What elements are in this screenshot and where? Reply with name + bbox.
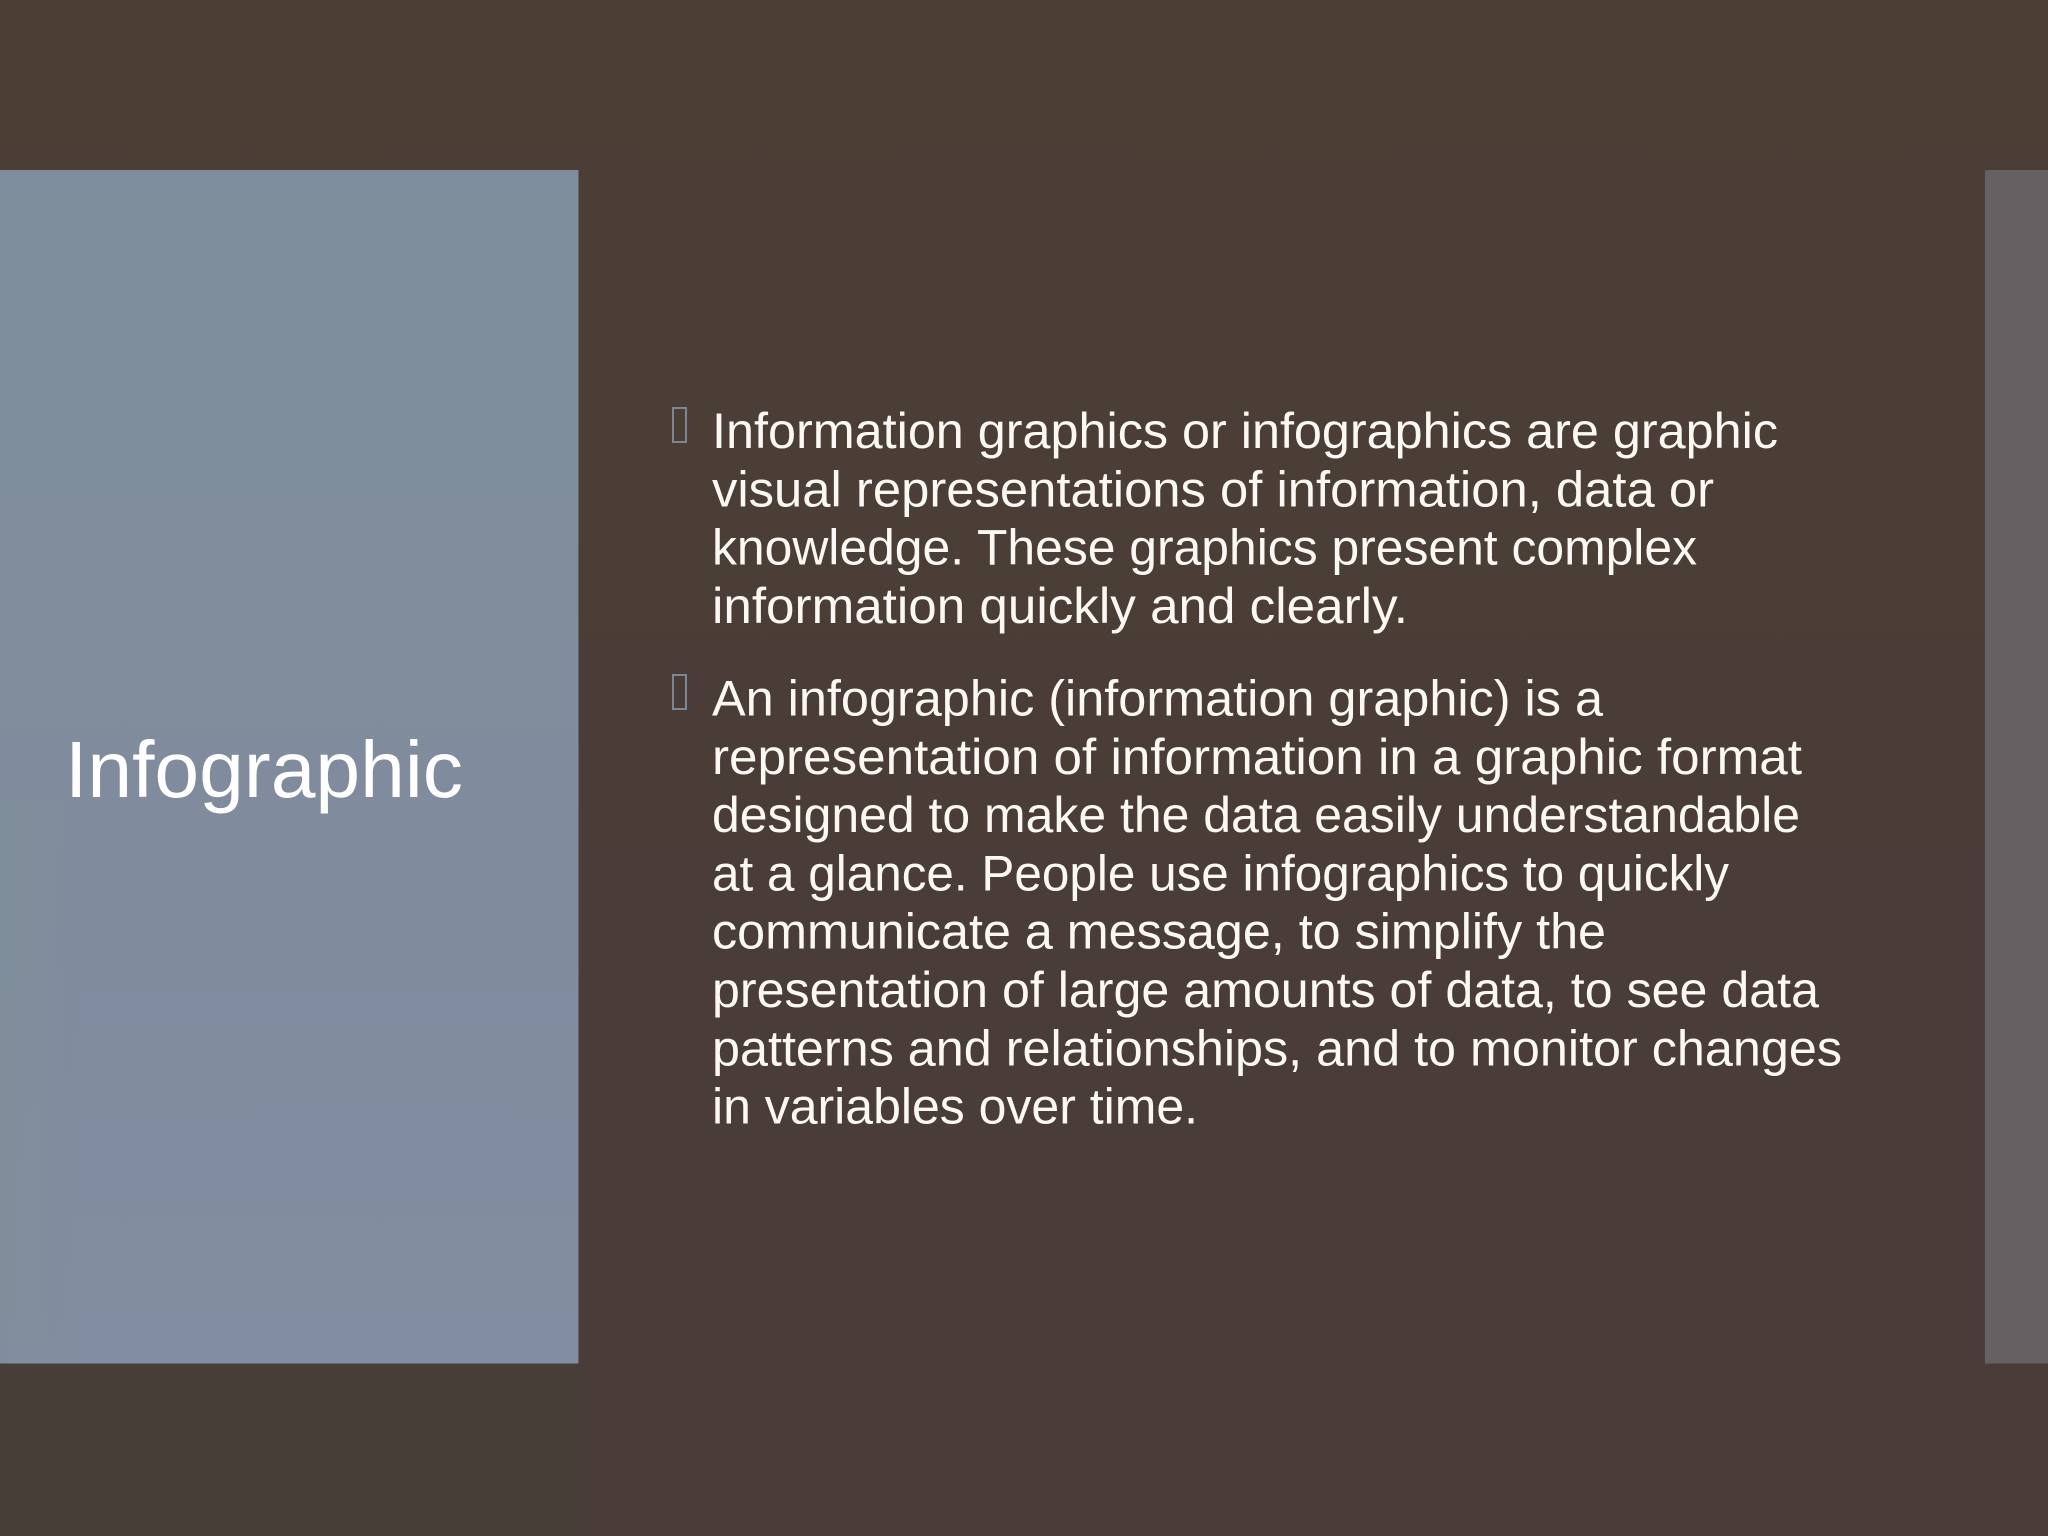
text block: first paragraph: knowledge. These graphics present complex <box>712 520 1697 576</box>
panel: right edge band <box>1985 170 2048 1364</box>
icon: second bullet <box>673 675 686 709</box>
text block: first paragraph: visual representations of information, data or <box>712 461 1714 517</box>
text block: second paragraph <box>673 670 1842 1135</box>
text block: first paragraph <box>673 403 1778 634</box>
text block: second paragraph: patterns and relationships, and to monitor changes <box>712 1020 1842 1076</box>
icon: first bullet <box>673 408 686 442</box>
background band below title panel <box>0 1364 578 1536</box>
text block: second paragraph: at a glance. People use infographics to quickly <box>712 845 1729 901</box>
text block: second paragraph: in variables over time. <box>712 1079 1198 1135</box>
text block: first paragraph: information quickly and clearly. <box>712 578 1408 634</box>
text block: second paragraph: representation of information in a graphic format <box>712 729 1802 785</box>
title: Infographic <box>65 725 463 814</box>
text block: first paragraph: Information graphics or infographics are graphic <box>712 403 1778 459</box>
text block: second paragraph: designed to make the data easily understandable <box>712 787 1800 843</box>
panel: title band <box>0 170 578 1364</box>
text block: second paragraph: presentation of large amounts of data, to see data <box>712 962 1819 1018</box>
text block: second paragraph: communicate a message, to simplify the <box>712 904 1606 960</box>
text block: second paragraph: An infographic (information graphic) is a <box>712 670 1603 726</box>
